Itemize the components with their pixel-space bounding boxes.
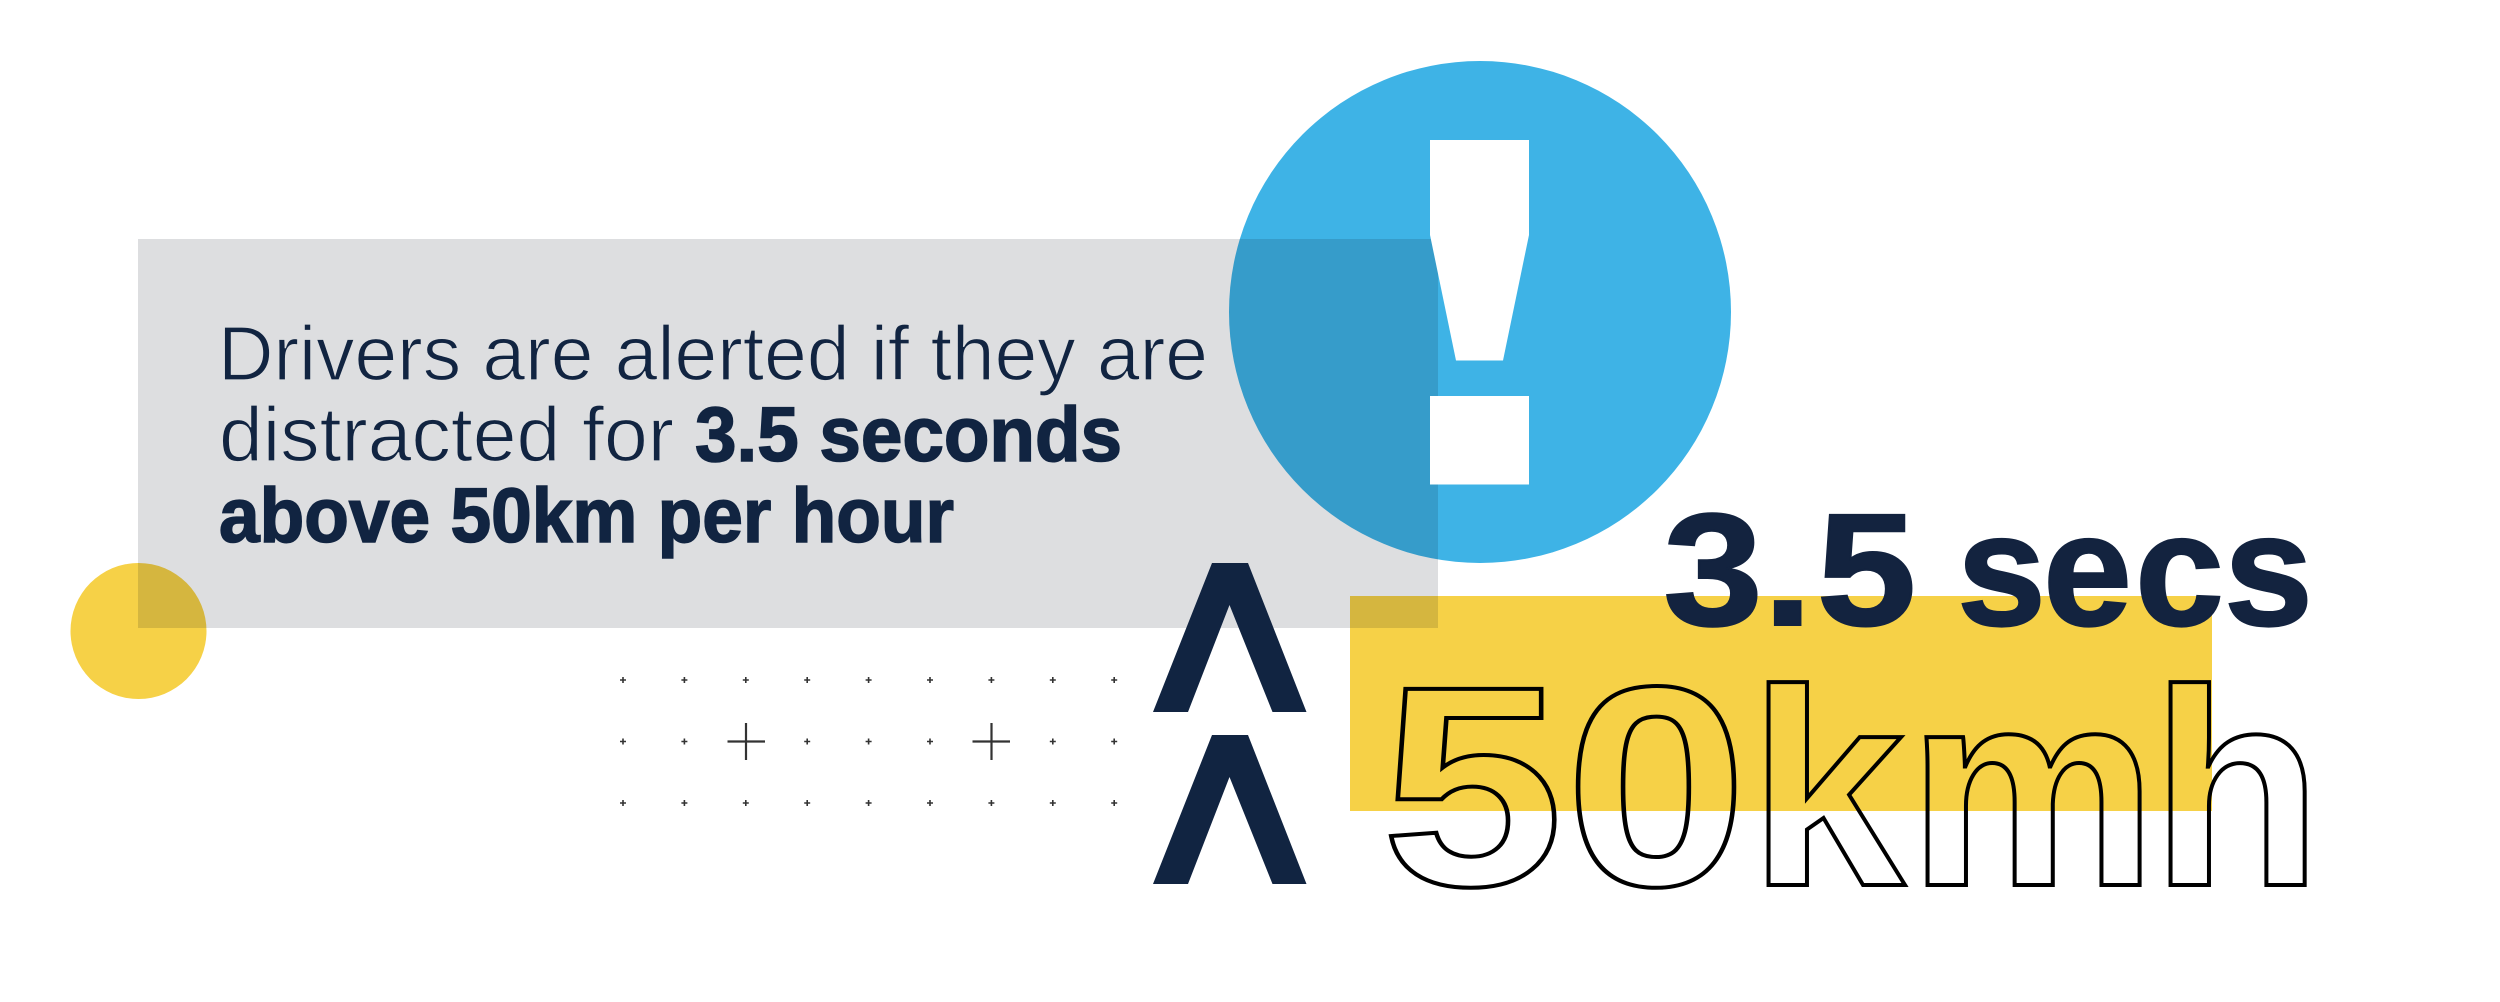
heading: 3.5 secs <box>1663 480 2313 659</box>
text block: distraction message <box>218 311 1208 559</box>
icon: white exclamation mark <box>1430 140 1529 484</box>
panel: yellow highlight block <box>1350 596 2212 811</box>
heading: 50kmh outlined: 50 <box>1381 628 1747 946</box>
heading: 3.5 secs: 3.5 <box>1663 480 1916 659</box>
heading: 3.5 secs: secs <box>1957 480 2313 659</box>
text block: distraction message: above 50km per hour <box>219 473 954 559</box>
text block: distraction message: 3.5 seconds <box>695 392 1122 478</box>
heading: 50kmh outlined <box>1381 628 2322 946</box>
icon: double upward chevrons <box>1153 563 1306 884</box>
heading: 50kmh outlined: kmh <box>1749 633 2322 945</box>
decorative plus grid <box>620 677 1117 806</box>
panel: grey message block <box>138 239 1438 628</box>
text block: distraction message: Drivers are alerted if they are <box>218 311 1208 397</box>
icon: yellow circle <box>70 563 206 699</box>
text block: distraction message: distracted for <box>219 392 674 478</box>
icon: blue alert circle <box>1229 61 1731 563</box>
